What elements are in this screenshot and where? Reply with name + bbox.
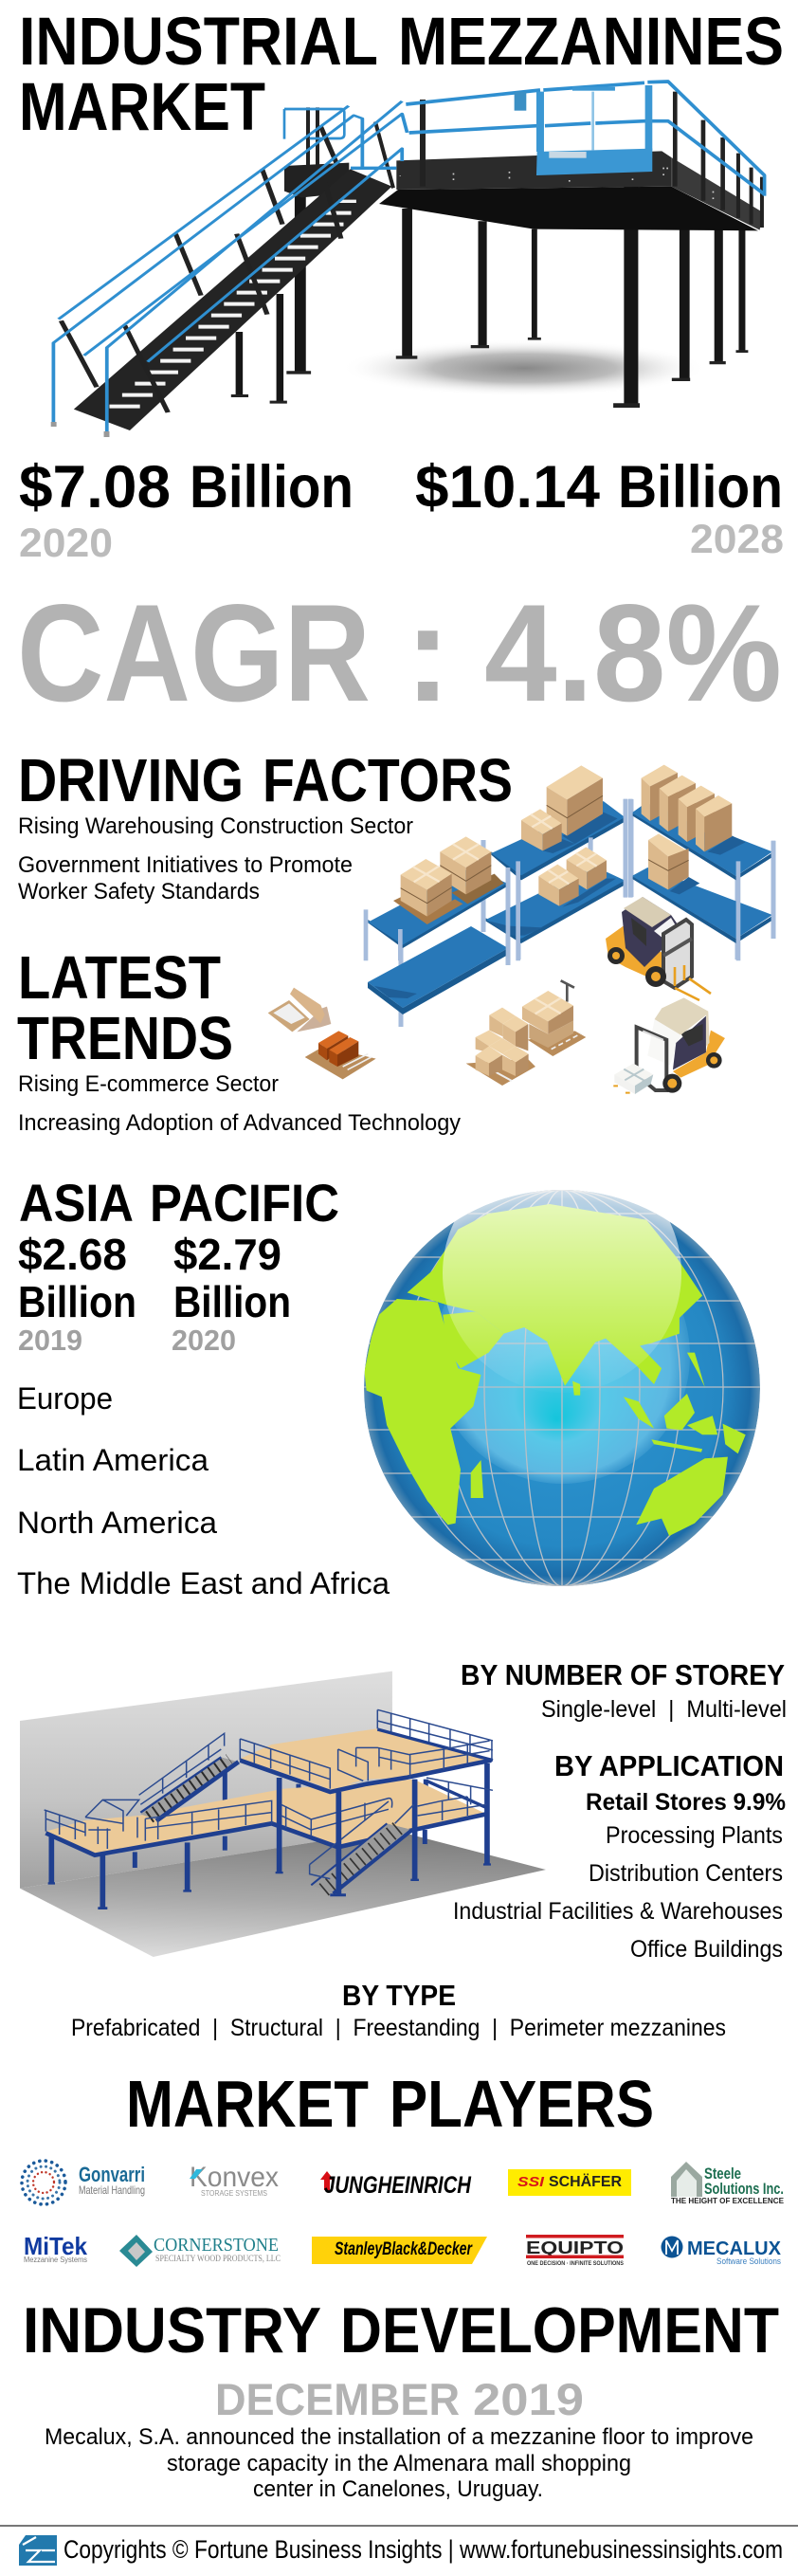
date: december 2019: 2019	[473, 2374, 584, 2424]
list: other regions: The Middle East and Africa	[17, 1566, 390, 1600]
stat: 2019 value: Billion	[18, 1277, 136, 1326]
logo: steele solutions	[671, 2162, 784, 2205]
text: latest trends list: Rising E-commerce Sector	[18, 1071, 279, 1097]
small open box	[268, 988, 331, 1032]
date: december 2019: DECEMBER	[215, 2374, 460, 2424]
market value 2028: Billion	[618, 454, 783, 521]
CAGR figure: 4.8%	[484, 575, 782, 730]
heading: industry development: INDUSTRY	[23, 2294, 321, 2366]
panel: by number of storey	[461, 1658, 787, 1723]
title	[19, 5, 784, 145]
logo: mecalux: MECALUX	[687, 2238, 782, 2259]
logo: konvex: Konvex	[190, 2162, 279, 2193]
heading: latest trends: TRENDS	[17, 1004, 233, 1072]
heading: driving factors: FACTORS	[263, 746, 513, 814]
stat: 2020 value	[172, 1230, 291, 1357]
logo: mitek: Mezzanine Systems	[24, 2256, 87, 2264]
pallet with orange boxes	[305, 1031, 376, 1079]
illustration: warehouse shelves, boxes and forklifts	[268, 765, 773, 1094]
panel: by application	[453, 1749, 786, 1963]
list: other regions: Latin America	[17, 1443, 209, 1477]
panel: driving factors	[18, 746, 513, 904]
heading: by application: BY APPLICATION	[554, 1749, 784, 1782]
logo: ssi schafer: SCHÄFER	[549, 2173, 622, 2190]
logo: ssi schafer	[508, 2169, 631, 2196]
text: storey options: Single-level | Multi-level	[541, 1696, 787, 1723]
logo: gonvarri: Gonvarri	[79, 2163, 145, 2186]
logo: ssi schafer: SSI	[517, 2174, 545, 2190]
heading: latest trends	[17, 943, 233, 1072]
heading: driving factors: DRIVING	[18, 746, 244, 814]
logo: mitek: MiTek	[24, 2232, 87, 2260]
text: latest trends list	[18, 1071, 461, 1136]
logo: steele solutions: THE HEIGHT OF EXCELLENCE	[671, 2196, 784, 2205]
market value 2020: Billion	[190, 454, 354, 521]
market value 2028	[415, 454, 784, 562]
text: type options: Prefabricated | Structural | Freestanding | Perimeter mezzanines	[71, 2015, 726, 2041]
illustration: globe	[364, 1154, 760, 1586]
heading: driving factors	[18, 746, 513, 814]
text: driving factors list: Worker Safety Standards	[18, 879, 260, 904]
stairs drawn at reference crop proportions	[51, 101, 408, 437]
text: application list: Distribution Centers	[589, 1860, 783, 1887]
logo: mecalux: Software Solutions	[716, 2256, 781, 2267]
list: other regions: Europe	[17, 1381, 113, 1416]
panel: industry development	[23, 2294, 779, 2502]
logo: jungheinrich: JUNGHEINRICH	[324, 2172, 472, 2199]
market value 2020: $7.08	[19, 454, 171, 521]
panel: latest trends	[17, 943, 461, 1136]
market value 2028: 2028	[690, 517, 784, 562]
pallet trucks with boxes	[466, 980, 586, 1086]
stat: 2020 value: $2.79	[173, 1230, 281, 1279]
stat: 2020 value: 2020	[172, 1324, 236, 1357]
text: driving factors list: Rising Warehousing Construction Sector	[18, 813, 413, 839]
deck drawn at 3x crop scale	[284, 82, 765, 237]
logo: stanley black and decker: StanleyBlack&Decker	[335, 2239, 473, 2259]
forklift facing left, lower	[613, 997, 725, 1094]
text: driving factors list: Government Initiatives to Promote	[18, 852, 353, 878]
rails	[45, 1709, 493, 1849]
heading: market players	[126, 2067, 654, 2141]
illustration: blue and black mezzanine platform with stairs	[51, 82, 765, 437]
text: driving factors list	[18, 813, 413, 904]
heading: by type: BY TYPE	[342, 1979, 456, 2012]
logo: equipto: ONE DECISION · INFINITE SOLUTIONS	[527, 2260, 625, 2267]
heading: asia pacific: ASIA	[19, 1173, 134, 1233]
panel: asia pacific region	[17, 1173, 390, 1600]
heading: market players: MARKET	[126, 2067, 369, 2141]
logo: equipto	[526, 2235, 625, 2267]
CAGR figure	[17, 575, 782, 730]
market value 2020: 2020	[19, 521, 113, 566]
stairs upper	[139, 1733, 239, 1821]
panel: by type	[71, 1979, 726, 2041]
heading: latest trends: LATEST	[18, 943, 221, 1012]
title: INDUSTRIAL	[19, 5, 378, 80]
stat: 2019 value	[18, 1230, 136, 1357]
heading: asia pacific: PACIFIC	[150, 1173, 339, 1233]
text: application list: Office Buildings	[630, 1936, 783, 1963]
text: application list: Retail Stores 9.9%	[586, 1789, 786, 1816]
icon: fortune business insights logo	[19, 2535, 57, 2566]
text: application list: Processing Plants	[606, 1822, 783, 1849]
title: MARKET	[19, 70, 265, 145]
logo: gonvarri	[22, 2161, 145, 2204]
logo: cornerstone: SPECIALTY WOOD PRODUCTS, LLC	[155, 2254, 281, 2263]
market value 2020	[19, 454, 354, 566]
CAGR figure: CAGR	[17, 575, 371, 730]
panel: market player logos	[22, 2161, 784, 2267]
footer	[19, 2535, 783, 2566]
text: development description: Mecalux, S.A. announced the installation of a mezzanine floor to improve	[45, 2424, 753, 2450]
stat: 2019 value: $2.68	[18, 1230, 127, 1279]
text: latest trends list: Increasing Adoption of Advanced Technology	[18, 1110, 461, 1136]
stat: 2019 value: 2019	[18, 1324, 82, 1357]
logo: steele solutions: Steele	[704, 2165, 741, 2183]
text: development description	[45, 2424, 753, 2502]
market value 2028: $10.14	[415, 454, 600, 521]
heading: asia pacific	[19, 1173, 339, 1233]
logo: mecalux	[662, 2236, 782, 2267]
stairs lower	[310, 1801, 414, 1894]
text: development description: storage capacity in the Almenara mall shopping	[167, 2451, 631, 2476]
date: december 2019	[215, 2374, 584, 2424]
logo: stanley black and decker	[312, 2237, 487, 2264]
illustration: blue multi-level mezzanine in a room	[20, 1672, 546, 1957]
list: other regions: North America	[17, 1506, 217, 1540]
stat: 2020 value: Billion	[173, 1277, 291, 1326]
logo: cornerstone: CORNERSTONE	[154, 2235, 279, 2256]
CAGR figure: :	[405, 575, 451, 730]
logo: konvex: STORAGE SYSTEMS	[201, 2189, 267, 2198]
logo: equipto: EQUIPTO	[526, 2238, 624, 2257]
list: other regions	[17, 1381, 390, 1600]
heading: industry development	[23, 2294, 779, 2366]
text: application list	[453, 1789, 786, 1963]
logo: gonvarri: Material Handling	[79, 2183, 145, 2197]
forklift facing right, upper	[606, 897, 711, 1000]
text: development description: center in Canelones, Uruguay.	[253, 2476, 543, 2502]
heading: market players: PLAYERS	[390, 2067, 654, 2141]
logo: cornerstone	[119, 2235, 281, 2267]
